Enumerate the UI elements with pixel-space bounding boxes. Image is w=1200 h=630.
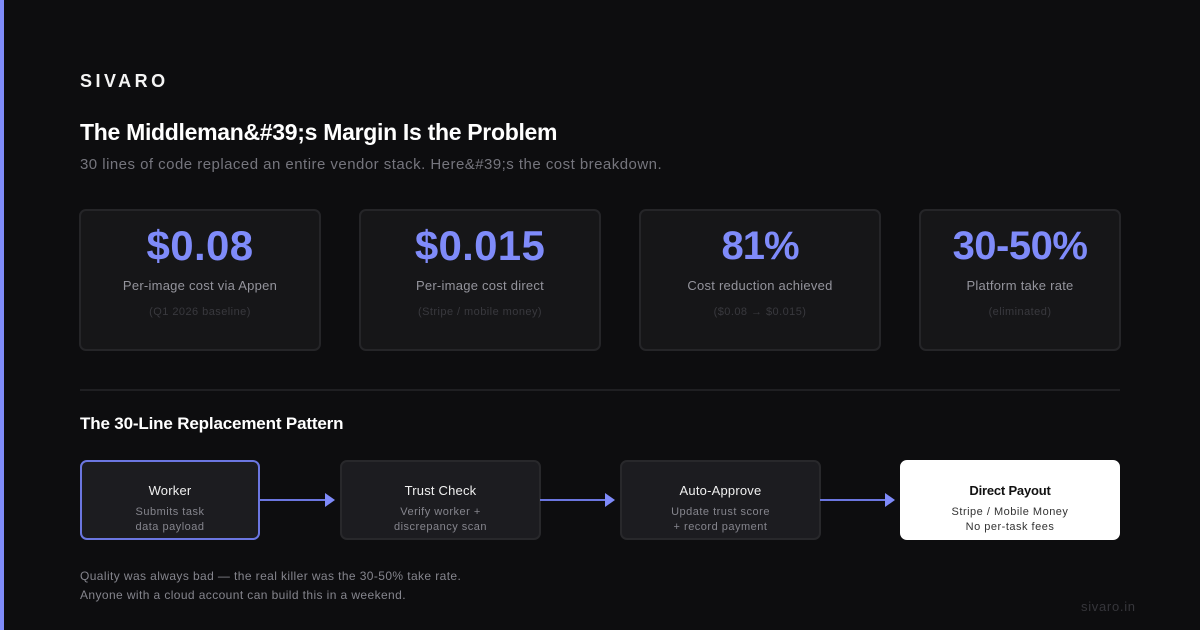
flow node: Worker	[80, 460, 260, 540]
stat card: take rate: Platform take rate	[966, 278, 1074, 293]
arrow: Auto-Approve to Direct Payout	[820, 493, 895, 507]
flow node: Auto-Approve: Auto-Approve	[680, 483, 761, 498]
footnote: Quality was always bad — the real killer was the 30-50% take rate.	[80, 569, 461, 583]
stat card: per-image via Appen	[79, 209, 321, 351]
stat card: take rate: (eliminated)	[989, 306, 1051, 318]
footnote: Anyone with a cloud account can build this in a weekend.	[80, 588, 406, 602]
flow node: Auto-Approve: + record payment	[674, 521, 767, 533]
flow node: Trust Check: Trust Check	[405, 483, 476, 498]
stat card: per-image via Appen: (Q1 2026 baseline)	[149, 306, 251, 318]
arrow: Trust Check to Auto-Approve	[540, 493, 615, 507]
subtitle: 30 lines of code replaced an entire vendor stack. Here&#39;s the cost breakdown.	[80, 156, 662, 173]
stat card: cost reduction: Cost reduction achieved	[687, 278, 833, 293]
flow node: Direct Payout: Direct Payout	[969, 483, 1051, 498]
flow node: Auto-Approve: Update trust score	[671, 506, 770, 518]
stat card: per-image direct: $0.015	[415, 222, 545, 269]
stat card: per-image via Appen: Per-image cost via Appen	[123, 278, 277, 293]
stat card: per-image direct: (Stripe / mobile money)	[418, 306, 542, 318]
title: The Middleman&#39;s Margin Is the Problem	[80, 119, 557, 145]
flow node: Direct Payout	[900, 460, 1120, 540]
footnote	[80, 569, 461, 602]
footer url: sivaro.in	[1081, 599, 1136, 614]
stat card: cost reduction	[639, 209, 881, 351]
stat card: per-image direct: Per-image cost direct	[416, 278, 544, 293]
flow node: Worker: Worker	[149, 483, 191, 498]
flow node: Trust Check	[340, 460, 541, 540]
stat card: cost reduction: 81%	[721, 224, 799, 268]
stat card: take rate	[919, 209, 1121, 351]
flow node: Direct Payout: Stripe / Mobile Money	[952, 506, 1068, 518]
stat card: take rate: 30-50%	[953, 224, 1087, 268]
flow node: Trust Check: Verify worker +	[400, 506, 481, 518]
flow node: Worker: data payload	[136, 521, 204, 533]
flow node: Trust Check: discrepancy scan	[394, 521, 487, 533]
arrow: Worker to Trust Check	[260, 493, 335, 507]
brand wordmark: SIVARO	[80, 71, 169, 91]
accent bar	[0, 0, 4, 630]
flow node: Auto-Approve	[620, 460, 821, 540]
stat card: per-image direct	[359, 209, 601, 351]
flow node: Direct Payout: No per-task fees	[966, 521, 1054, 533]
flow node: Worker: Submits task	[136, 506, 204, 518]
stat card: per-image via Appen: $0.08	[146, 222, 254, 269]
stat card: cost reduction: ($0.08 → $0.015)	[714, 306, 806, 318]
section heading: The 30-Line Replacement Pattern	[80, 414, 343, 433]
